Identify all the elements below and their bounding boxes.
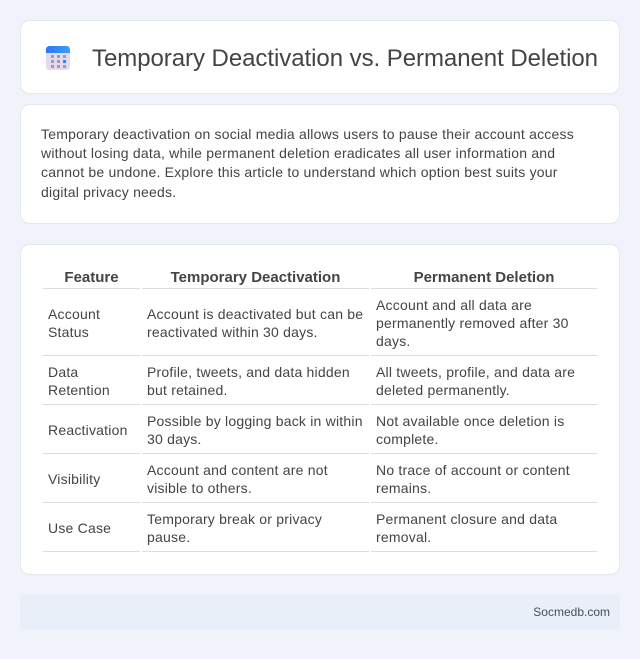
row: Account Status: Account bbox=[48, 306, 100, 322]
text block: introduction: Temporary deactivation on social media allows users to pause their account access bbox=[41, 126, 574, 142]
text block: introduction: without losing data, while permanent deletion eradicates all user information and bbox=[41, 145, 555, 161]
icon: calendar bbox=[46, 46, 70, 70]
panel: introduction bbox=[20, 104, 620, 224]
row: Visibility: No trace of account or content bbox=[376, 462, 570, 478]
row: Use Case: pause. bbox=[147, 529, 190, 545]
row: Use Case: Permanent closure and data bbox=[376, 511, 557, 527]
title: Temporary Deactivation vs. Permanent Deletion bbox=[92, 45, 598, 72]
row: Visibility: Account and content are not bbox=[147, 462, 328, 478]
heading: Permanent Deletion: Permanent Deletion bbox=[414, 269, 554, 286]
row: Use Case bbox=[43, 511, 597, 552]
text block: introduction: cannot be undone. Explore this article to understand which option best suits your bbox=[41, 164, 558, 180]
row: Reactivation bbox=[43, 413, 597, 454]
row: Data Retention: Profile, tweets, and data hidden bbox=[147, 364, 350, 380]
row: Data Retention: Data bbox=[48, 364, 78, 380]
row: Data Retention: but retained. bbox=[147, 382, 228, 398]
heading: Temporary Deactivation: Temporary Deactivation bbox=[171, 269, 340, 286]
row: Account Status bbox=[43, 297, 597, 356]
footer text: Socmedb.com bbox=[533, 605, 610, 619]
row: Data Retention: All tweets, profile, and data are bbox=[376, 364, 575, 380]
row: Visibility: visible to others. bbox=[147, 480, 252, 496]
row: Reactivation: Reactivation bbox=[48, 422, 128, 438]
panel: header bbox=[20, 20, 620, 94]
row: Account Status: Status bbox=[48, 324, 89, 340]
row: Account Status: Account and all data are bbox=[376, 297, 532, 313]
row: Use Case: Use Case bbox=[48, 520, 111, 536]
row: Visibility: Visibility bbox=[48, 471, 100, 487]
text block: introduction bbox=[41, 126, 574, 200]
footer bar bbox=[20, 595, 620, 629]
row: Visibility bbox=[43, 462, 597, 503]
row: Data Retention: Retention bbox=[48, 382, 110, 398]
row: Data Retention bbox=[43, 364, 597, 405]
row: Data Retention: deleted permanently. bbox=[376, 382, 510, 398]
row: Account Status: reactivated within 30 days. bbox=[147, 324, 318, 340]
row: Account Status: permanently removed after 30 bbox=[376, 315, 569, 331]
row: Reactivation: Not available once deletion is bbox=[376, 413, 564, 429]
row: Account Status: days. bbox=[376, 333, 411, 349]
panel: comparison table bbox=[20, 244, 620, 575]
text block: introduction: digital privacy needs. bbox=[41, 184, 176, 200]
heading: Feature: Feature bbox=[64, 269, 119, 286]
row: Reactivation: 30 days. bbox=[147, 431, 202, 447]
row: Account Status: Account is deactivated but can be bbox=[147, 306, 363, 322]
row: Reactivation: Possible by logging back in within bbox=[147, 413, 363, 429]
row: Reactivation: complete. bbox=[376, 431, 439, 447]
row: Use Case: Temporary break or privacy bbox=[147, 511, 322, 527]
row: Visibility: remains. bbox=[376, 480, 431, 496]
row: Use Case: removal. bbox=[376, 529, 431, 545]
